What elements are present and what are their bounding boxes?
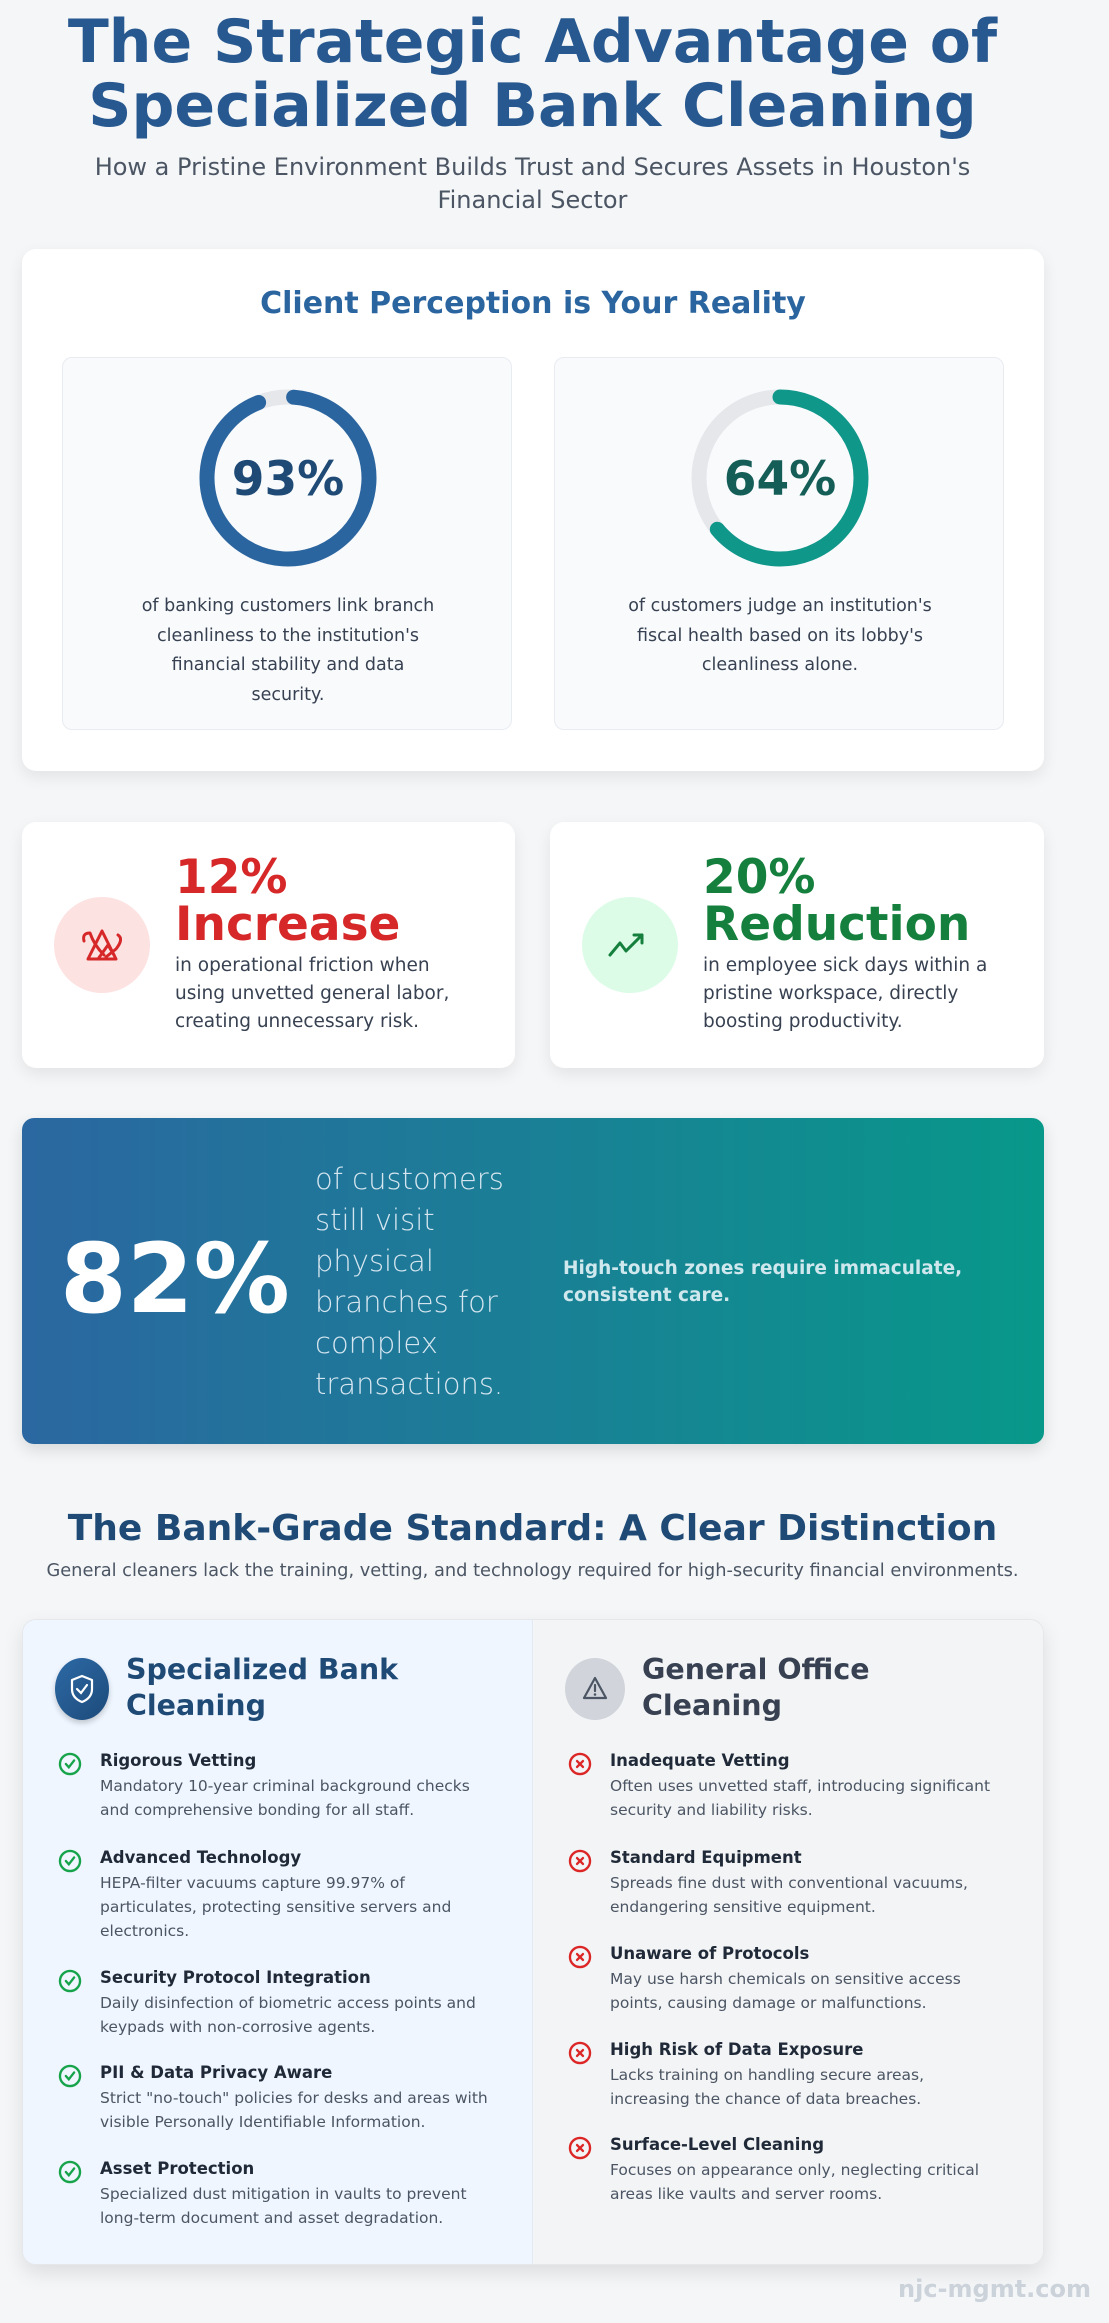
donut chart: 64%: [692, 390, 868, 566]
item: surface-level: [568, 2135, 979, 2203]
item: security protocol: Security Protocol Integration: [100, 1968, 371, 1987]
item: inadequate vetting: Inadequate Vetting: [610, 1751, 790, 1770]
panel: client perception: [22, 249, 1044, 771]
donut chart: 64%: 64%: [724, 452, 836, 507]
item: unaware protocols: [568, 1944, 961, 2012]
subheading: comparison: General cleaners lack the training, vetting, and technology required for high-security financial environments.: [46, 1560, 1019, 1581]
item: advanced technology: HEPA-filter vacuums capture 99.97% of particulates, protecting sensitive servers and electronics.: [100, 1874, 451, 1940]
stat: 20% reduction: Reduction: [703, 897, 970, 952]
heading: bank-grade standard: The Bank-Grade Standard: A Clear Distinction: [68, 1508, 997, 1549]
item: pii privacy: PII & Data Privacy Aware: [100, 2063, 332, 2082]
item: unaware protocols: Unaware of Protocols: [610, 1944, 809, 1963]
panel: 12% increase: [22, 822, 515, 1068]
heading: specialized bank cleaning: [126, 1653, 398, 1722]
item: inadequate vetting: [568, 1751, 990, 1819]
item: standard equipment: [568, 1848, 968, 1916]
item: data exposure: Lacks training on handling secure areas, increasing the chance of data breaches.: [610, 2066, 924, 2108]
heading: general office cleaning: General Office: [642, 1653, 870, 1686]
column: general office cleaning: [534, 1620, 1045, 2266]
stat: 20% reduction: [703, 850, 970, 952]
item: unaware protocols: May use harsh chemicals on sensitive access points, causing damage or malfunctions.: [610, 1970, 961, 2012]
item: pii privacy: Strict "no-touch" policies for desks and areas with visible Personally Identifiable Information.: [100, 2089, 488, 2131]
item: standard equipment: Standard Equipment: [610, 1848, 802, 1867]
list: general drawbacks: [568, 1751, 990, 2203]
text: reduction description: in employee sick days within a pristine workspace, directly boosting productivity.: [703, 955, 987, 1032]
item: asset protection: Asset Protection: [100, 2159, 254, 2178]
heading: client perception: Client Perception is Your Reality: [260, 286, 806, 321]
item: surface-level: Focuses on appearance only, neglecting critical areas like vaults and server rooms.: [610, 2161, 979, 2203]
item: advanced technology: [58, 1848, 451, 1940]
stat: 82%: 82%: [60, 1223, 290, 1335]
panel: 20% reduction: [550, 822, 1044, 1068]
text: 64% description: of customers judge an institution's fiscal health based on its lobby's cleanliness alone.: [628, 596, 932, 675]
item: inadequate vetting: Often uses unvetted staff, introducing significant security and liability risks.: [610, 1777, 990, 1819]
item: security protocol: Daily disinfection of biometric access points and keypads with non-corrosive agents.: [100, 1994, 476, 2036]
icon: warning: [565, 1658, 625, 1720]
callout: high-touch zones: High-touch zones require immaculate, consistent care.: [563, 1258, 962, 1306]
text: 93% description: of banking customers link branch cleanliness to the institution's financial stability and data security.: [142, 596, 434, 705]
title: Specialized Bank Cleaning: [88, 71, 977, 141]
icon: trending up: [582, 897, 678, 993]
item: rigorous vetting: Mandatory 10-year criminal background checks and comprehensive bonding for all staff.: [100, 1777, 470, 1819]
heading: specialized bank cleaning: Specialized Bank: [126, 1653, 398, 1686]
icon: tangled risk: [54, 897, 150, 993]
stat: 12% increase: Increase: [175, 897, 400, 952]
panel: comparison: [22, 1619, 1044, 2265]
stat box: 93%: [62, 357, 512, 730]
heading: specialized bank cleaning: Cleaning: [126, 1689, 266, 1722]
footer: watermark: njc-mgmt.com: [898, 2275, 1091, 2303]
stat box: 64%: [554, 357, 1004, 730]
item: security protocol: [58, 1968, 476, 2036]
item: data exposure: [568, 2040, 924, 2108]
list: specialized benefits: [58, 1751, 488, 2227]
stat: 12% increase: 12%: [175, 850, 288, 905]
item: pii privacy: [58, 2063, 488, 2131]
column: specialized bank cleaning: [23, 1620, 533, 2266]
text: increase description: in operational friction when using unvetted general labor, creating unnecessary risk.: [175, 955, 449, 1032]
donut chart: 93%: 93%: [232, 452, 344, 507]
title: The Strategic Advantage of: [68, 7, 997, 77]
icon: shield: [55, 1658, 109, 1720]
donut chart: 93%: [200, 390, 376, 566]
item: surface-level: Surface-Level Cleaning: [610, 2135, 824, 2154]
item: data exposure: High Risk of Data Exposure: [610, 2040, 863, 2059]
item: rigorous vetting: Rigorous Vetting: [100, 1751, 256, 1770]
item: asset protection: [58, 2159, 467, 2227]
item: rigorous vetting: [58, 1751, 470, 1819]
heading: general office cleaning: [642, 1653, 870, 1722]
title: [68, 7, 998, 141]
subtitle: How a Pristine Environment Builds Trust and Secures Assets in Houston's Financial Sector: [95, 153, 970, 214]
heading: general office cleaning: Cleaning: [642, 1689, 782, 1722]
item: asset protection: Specialized dust mitigation in vaults to prevent long-term document and asset degradation.: [100, 2185, 467, 2227]
item: standard equipment: Spreads fine dust with conventional vacuums, endangering sensitive equipment.: [610, 1874, 968, 1916]
stat: 20% reduction: 20%: [703, 850, 816, 905]
stat: 12% increase: [175, 850, 400, 952]
item: advanced technology: Advanced Technology: [100, 1848, 301, 1867]
banner: 82%: [22, 1118, 1044, 1444]
text: customers visit branches: of customers still visit physical branches for complex transactions.: [315, 1162, 504, 1401]
